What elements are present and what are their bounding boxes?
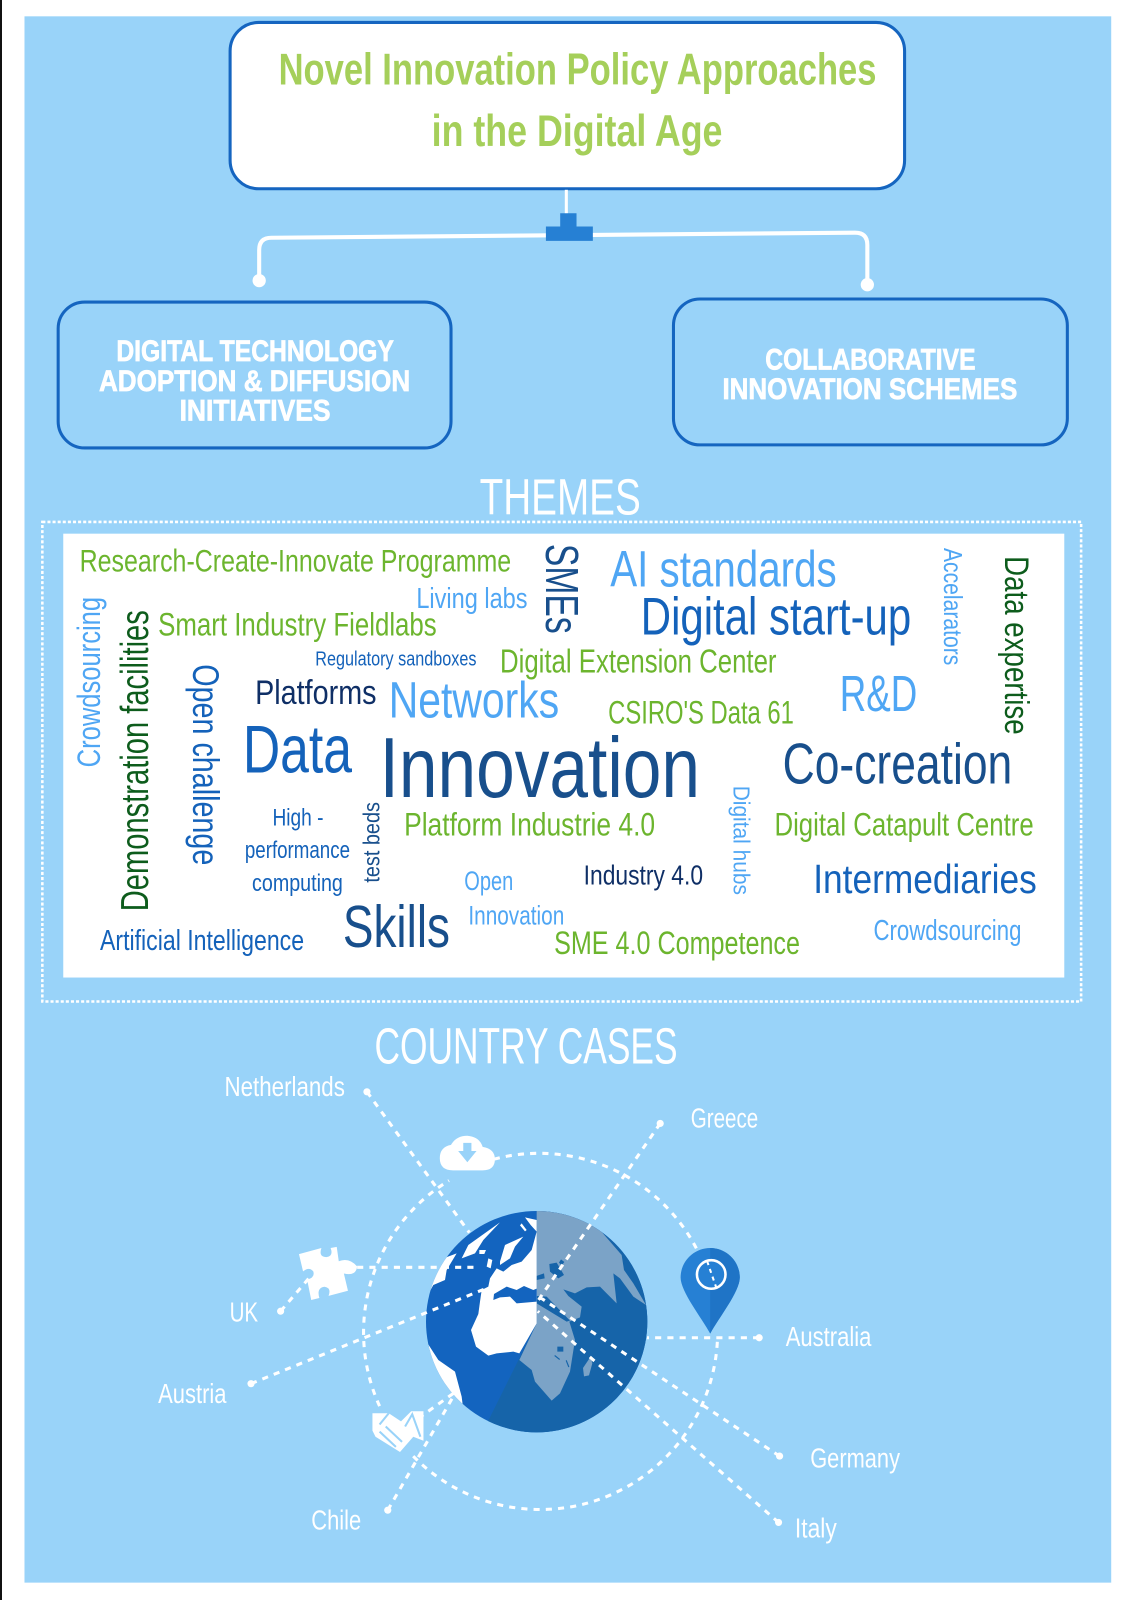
word cloud panel: AI standards (610, 541, 837, 598)
country labels (158, 1071, 900, 1544)
country labels: Chile (311, 1505, 361, 1536)
country labels: Greece (691, 1103, 758, 1134)
word cloud panel: Crowdsourcing (70, 597, 107, 767)
word cloud panel: Digital hubs (729, 786, 755, 895)
word cloud panel: Open challenge (185, 664, 226, 865)
globe (420, 1207, 653, 1437)
word cloud panel: Platform Industrie 4.0 (404, 806, 655, 843)
word cloud panel: performance (245, 837, 350, 864)
word cloud panel: Crowdsourcing (873, 915, 1021, 947)
icon: map pin (681, 1248, 740, 1334)
word cloud panel: SMEs (536, 544, 588, 634)
word cloud panel (63, 534, 1064, 978)
word cloud panel: Digital Extension Center (500, 643, 777, 680)
word cloud panel: test beds (359, 802, 385, 883)
word cloud panel: Living labs (416, 583, 528, 615)
word cloud panel: Intermediaries (813, 856, 1037, 902)
box: collaborative innovation schemes (673, 299, 1067, 445)
word cloud panel: Platforms (255, 674, 377, 712)
box: collaborative innovation schemes: COLLABORATIVE (765, 343, 976, 376)
word cloud panel: Data (243, 712, 352, 787)
themes dotted frame (42, 522, 1081, 1002)
box: digital technology adoption: INITIATIVES (180, 394, 331, 427)
title box (230, 22, 905, 189)
icon: handshake (372, 1411, 423, 1452)
left page edge (0, 0, 2, 1600)
title box: in the Digital Age (432, 105, 722, 156)
word cloud panel: Innovation (380, 720, 700, 816)
country labels: Australia (786, 1321, 872, 1352)
pointer dots (247, 1088, 783, 1526)
country labels: UK (230, 1296, 259, 1327)
country labels: Germany (810, 1442, 900, 1473)
country labels: Italy (795, 1513, 837, 1544)
word cloud panel: Innovation (468, 900, 564, 930)
box: digital technology adoption: DIGITAL TECHNOLOGY (116, 335, 394, 368)
heading: country cases: COUNTRY CASES (374, 1017, 678, 1074)
word cloud panel: Networks (389, 671, 559, 728)
word cloud panel: computing (252, 870, 343, 897)
country labels: Netherlands (224, 1071, 345, 1102)
word cloud panel: Industry 4.0 (584, 860, 703, 891)
word cloud panel: Co-creation (783, 733, 1012, 797)
word cloud panel: SME 4.0 Competence (554, 924, 800, 961)
word cloud panel: Skills (343, 893, 450, 960)
title box: Novel Innovation Policy Approaches (279, 44, 877, 95)
word cloud panel: Artificial Intelligence (100, 925, 304, 957)
word cloud panel: Data expertise (997, 556, 1035, 735)
word cloud panel: Smart Industry Fieldlabs (158, 606, 437, 643)
word cloud panel: Research-Create-Innovate Programme (80, 542, 511, 578)
word cloud panel: High - (272, 805, 323, 832)
connector between title and branches (253, 190, 874, 291)
word cloud panel: Digital start-up (641, 588, 911, 647)
box: digital technology adoption (58, 302, 451, 448)
word cloud panel: Accelarators (938, 548, 966, 665)
word cloud panel: Digital Catapult Centre (774, 806, 1034, 843)
word cloud panel: Open (464, 866, 513, 896)
dashed orbit circle (364, 1153, 717, 1510)
heading: themes: THEMES (480, 468, 641, 525)
word cloud panel: Demonstration facilities (114, 610, 157, 911)
country pointer lines (251, 1092, 780, 1522)
icon: puzzle piece (299, 1247, 357, 1300)
box: digital technology adoption: ADOPTION & DIFFUSION (99, 365, 410, 398)
box: collaborative innovation schemes: INNOVATION SCHEMES (722, 373, 1017, 406)
word cloud panel: CSIRO'S Data 61 (608, 693, 794, 730)
word cloud panel: R&D (840, 665, 917, 722)
icon: cloud download (440, 1136, 495, 1170)
word cloud panel: Regulatory sandboxes (315, 648, 477, 670)
country labels: Austria (158, 1378, 227, 1409)
